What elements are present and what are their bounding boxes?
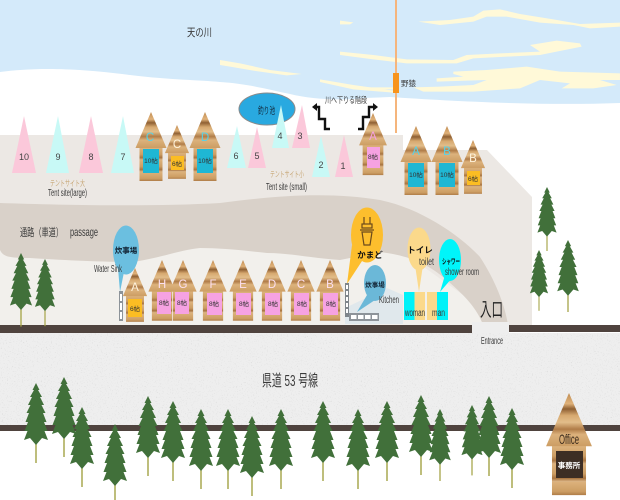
icon: cable car bbox=[393, 73, 399, 93]
background: sky bbox=[0, 0, 620, 110]
cabin: G 8 mats: 8帖 bbox=[177, 298, 188, 307]
tent 3: 3 bbox=[297, 131, 303, 141]
cabin: D 8 mats: D bbox=[268, 279, 276, 291]
cabin: E 8 mats: 8帖 bbox=[239, 299, 250, 308]
panel: fishing pond bbox=[239, 93, 295, 125]
tent 3 bbox=[292, 105, 310, 148]
cabin: B 10 mats: B bbox=[443, 146, 451, 158]
cabin: D 10 mats bbox=[190, 112, 220, 181]
tent 10: 10 bbox=[19, 152, 29, 162]
label: entrance: Entrance bbox=[481, 336, 503, 347]
tent 2 bbox=[312, 136, 330, 177]
cabin: G 8 mats: G bbox=[179, 279, 188, 291]
cabin: C 10 mats bbox=[136, 112, 166, 181]
callout: kitchen: Kitchen bbox=[379, 295, 399, 306]
label: tent site small: Tent site (small) bbox=[266, 182, 307, 193]
callout: toilet bbox=[407, 228, 434, 292]
callout: shower: shower room bbox=[445, 267, 479, 278]
cabin: C 8 mats bbox=[287, 260, 315, 321]
icon: kitchen counter vertical bbox=[345, 283, 349, 317]
cabin: B 8 mats bbox=[316, 260, 344, 321]
snowy white land bbox=[0, 69, 620, 330]
icon: kamado stove bbox=[360, 217, 374, 245]
tent 10 bbox=[12, 116, 36, 173]
tent 5: 5 bbox=[254, 151, 260, 161]
label: entrance bbox=[480, 300, 503, 347]
tent 8 bbox=[79, 116, 103, 173]
cabin: C 8 mats: C bbox=[297, 279, 305, 291]
cabin: C 6 mats bbox=[165, 125, 189, 179]
callout: water sink: 炊事場 bbox=[115, 245, 138, 255]
road edge upper left bbox=[0, 325, 472, 333]
campground ground area bbox=[0, 135, 532, 325]
cabin: D 10 mats: D bbox=[201, 132, 209, 144]
callout: kamado: かまど bbox=[357, 250, 383, 260]
tent 9 bbox=[46, 116, 69, 173]
road edge lower bbox=[0, 425, 620, 431]
label: entrance: 入口 bbox=[480, 300, 503, 321]
cabin: D 10 mats: 10帖 bbox=[198, 156, 212, 165]
callout: kitchen: 炊事場 bbox=[365, 280, 385, 289]
arrow: stairs left bbox=[312, 103, 330, 129]
label: tent site small: テントサイト小 bbox=[270, 170, 304, 179]
tent 8: 8 bbox=[88, 152, 94, 162]
cabin: H 8 mats bbox=[148, 260, 176, 321]
cabin: C 10 mats: 10帖 bbox=[144, 156, 158, 165]
cabin: A 8 mats upper: 8帖 bbox=[368, 152, 379, 161]
tent 6: 6 bbox=[233, 151, 239, 161]
tent 7: 7 bbox=[120, 152, 126, 162]
icon: kitchen counter horizontal bbox=[349, 313, 379, 321]
kitchen backdrop bbox=[345, 288, 403, 324]
label: cable car: 野猿 bbox=[401, 78, 416, 88]
cabin: D 8 mats bbox=[258, 260, 286, 321]
tent 2: 2 bbox=[318, 160, 324, 170]
tent 7 bbox=[111, 116, 134, 173]
cabin: D 8 mats: 8帖 bbox=[268, 299, 279, 308]
cabin: A 10 mats bbox=[400, 126, 432, 195]
building: office: Office bbox=[559, 431, 579, 447]
cabin: F 8 mats: 8帖 bbox=[209, 299, 220, 308]
cabin: B 6 mats: 6帖 bbox=[468, 174, 479, 183]
tent 5 bbox=[248, 127, 266, 168]
callout: water sink bbox=[94, 226, 139, 292]
cabin: E 8 mats bbox=[229, 260, 257, 321]
building: office bbox=[546, 393, 592, 495]
cabin: A 10 mats: 10帖 bbox=[409, 170, 423, 179]
cabin: G 8 mats bbox=[169, 260, 197, 321]
trees: right side bbox=[530, 187, 579, 312]
tent 4: 4 bbox=[277, 131, 283, 141]
prefectural road bbox=[0, 322, 620, 425]
cabin: A 8 mats upper: A bbox=[369, 131, 377, 143]
tent 9: 9 bbox=[55, 152, 61, 162]
arrow: stairs right bbox=[358, 103, 378, 129]
cabin: C 6 mats: C bbox=[173, 139, 181, 151]
callout: kitchen bbox=[357, 265, 399, 312]
road edge upper right bbox=[509, 325, 620, 332]
panel: restroom blocks bbox=[404, 292, 448, 320]
cabin: B 6 mats bbox=[461, 140, 485, 194]
callout: shower: シャワー bbox=[442, 257, 460, 266]
cabin: B 6 mats: B bbox=[469, 153, 477, 165]
passage road bbox=[0, 195, 508, 325]
cabin: A 6 mats lower bbox=[123, 268, 147, 322]
cabin: A 10 mats: A bbox=[412, 146, 420, 158]
clouds bbox=[220, 9, 620, 93]
title: milky way river: 天の川 bbox=[187, 27, 212, 39]
cabin: B 10 mats bbox=[432, 126, 462, 195]
label: tent site large bbox=[48, 178, 87, 199]
cabin: F 8 mats: F bbox=[209, 279, 217, 291]
icon: water sink counter bbox=[119, 291, 123, 321]
cabin: E 8 mats: E bbox=[239, 279, 247, 291]
callout: kamado bbox=[347, 208, 383, 284]
lower camp area bbox=[0, 245, 485, 325]
label: passage: passage bbox=[70, 225, 98, 239]
cabin: A 6 mats lower: 6帖 bbox=[130, 304, 141, 313]
trees: bottom row bbox=[24, 377, 524, 500]
cabin: H 8 mats: H bbox=[158, 279, 166, 291]
cabin: C 8 mats: 8帖 bbox=[297, 299, 308, 308]
tent 1: 1 bbox=[340, 161, 346, 171]
label: tent site large: Tent site(large) bbox=[48, 188, 87, 199]
tent 6 bbox=[227, 126, 246, 168]
callout: toilet: トイレ bbox=[407, 245, 433, 255]
cabin: C 6 mats: 6帖 bbox=[172, 159, 183, 168]
tent 4 bbox=[272, 105, 289, 148]
label: prefectural road 53: 県道 53 号線 bbox=[262, 372, 318, 390]
pole: cable car line bbox=[395, 0, 397, 133]
cabin: F 8 mats bbox=[199, 260, 227, 321]
trees: upper left bbox=[10, 253, 55, 327]
label: stairs to river: 川へ下りる階段 bbox=[325, 95, 367, 105]
label: tent site large: テントサイト大 bbox=[50, 178, 85, 188]
panel: restroom blocks: man bbox=[432, 308, 445, 319]
cabin: B 10 mats: 10帖 bbox=[440, 170, 454, 179]
callout: water sink: Water Sink bbox=[94, 264, 123, 275]
cabin: B 8 mats: B bbox=[326, 279, 334, 291]
building: office: 事務所 bbox=[558, 460, 581, 470]
tent 1 bbox=[335, 135, 353, 177]
panel: restroom blocks: woman bbox=[404, 308, 425, 319]
cabin: A 8 mats upper bbox=[359, 113, 387, 175]
cabin: C 10 mats: C bbox=[146, 132, 154, 144]
label: passage: 通路（車道） bbox=[20, 225, 63, 239]
label: tent site small bbox=[266, 170, 307, 193]
cabin: H 8 mats: 8帖 bbox=[159, 298, 170, 307]
cabin: B 8 mats: 8帖 bbox=[326, 299, 337, 308]
callout: toilet: toilet bbox=[419, 257, 434, 268]
panel: tent sites bbox=[12, 105, 353, 177]
cabin: A 6 mats lower: A bbox=[131, 282, 139, 294]
callout: shower bbox=[439, 239, 479, 292]
panel: fishing pond: 釣り池 bbox=[258, 105, 275, 117]
